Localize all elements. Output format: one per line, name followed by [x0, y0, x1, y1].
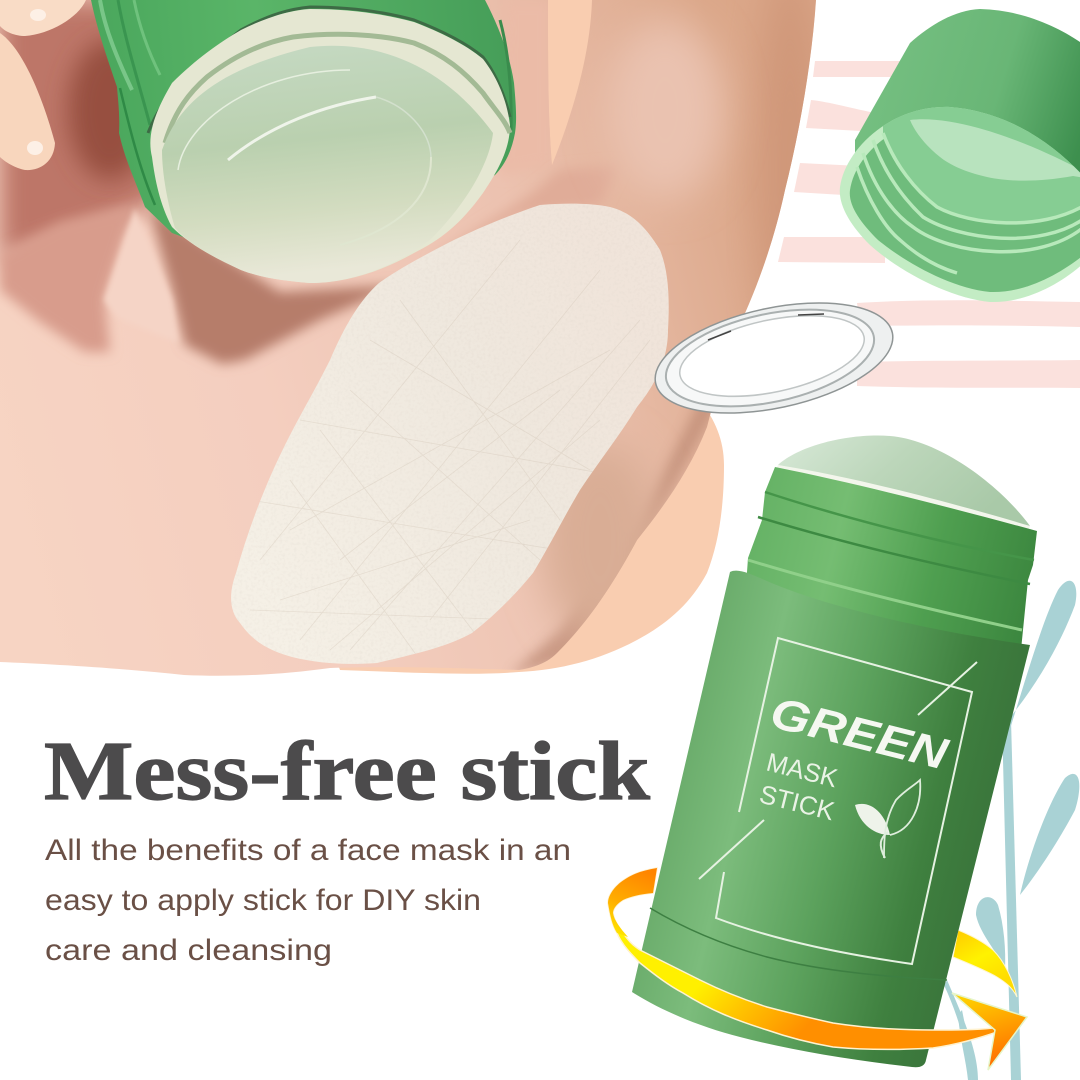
body text: [45, 834, 571, 967]
green cap: [840, 0, 1080, 320]
product: green mask stick: MASK: [764, 747, 841, 793]
palm shadows: [0, 0, 400, 364]
skincare paste swatch: [220, 195, 680, 675]
stick applicator in use: [91, 0, 516, 283]
sleeve: [632, 571, 1030, 1067]
icon: tea leaf: [855, 780, 920, 858]
body text: All the benefits of a face mask in an: [45, 834, 571, 867]
cap interior threads: [850, 100, 1080, 292]
product: green mask stick: [632, 436, 1037, 1067]
rotation arrow: front section: [608, 868, 1027, 1070]
clear inner lid: [645, 284, 903, 432]
label text: GREEN: [766, 688, 953, 780]
shadow edge: [148, 7, 510, 133]
finger side tones: [750, 0, 816, 301]
sleeve band line: [650, 908, 947, 980]
body text: easy to apply stick for DIY skin: [45, 884, 481, 917]
peach blob behind hand: [280, 0, 724, 674]
photo: hand: [0, 0, 830, 690]
mask tip: [150, 9, 510, 283]
label frame: [699, 638, 977, 964]
pink hand-drawn stripes: [778, 61, 1080, 388]
mask dome: [778, 436, 1030, 526]
teal plant sprigs: [944, 581, 1079, 1080]
cap rim: [840, 107, 1080, 302]
fingertips top-left: [0, 0, 86, 170]
rotation arrow: back section: [953, 930, 1017, 997]
neck collar: [745, 467, 1037, 660]
product: green mask stick: STICK: [757, 779, 838, 826]
body text: care and cleansing: [45, 934, 332, 967]
skin right of stick: [500, 0, 552, 175]
green threaded collar: [91, 0, 516, 280]
heading: Mess-free stick: [44, 725, 650, 818]
